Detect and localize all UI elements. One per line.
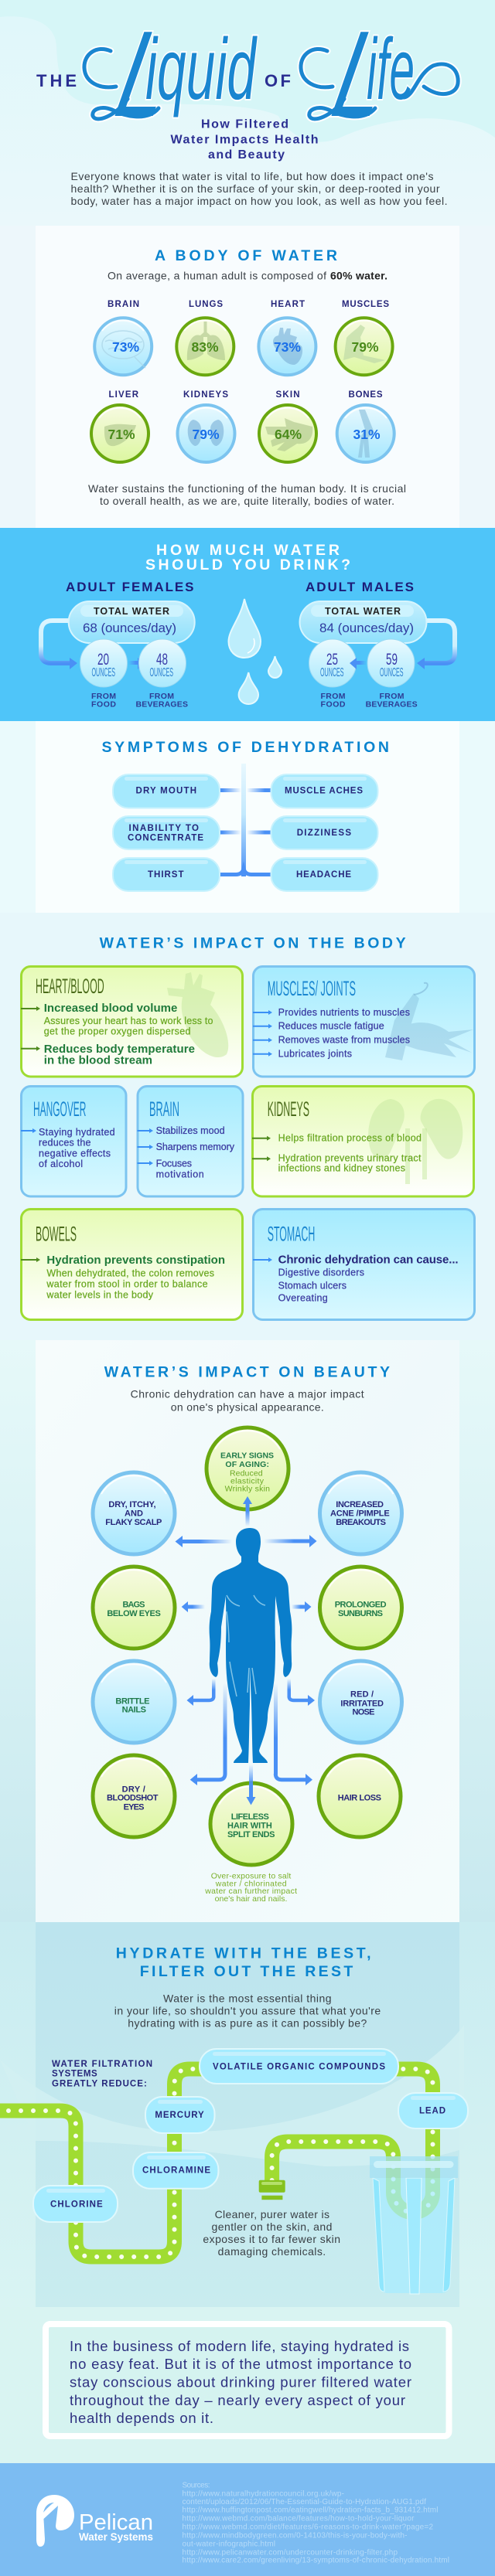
panel: how much water should you drink [0, 528, 495, 721]
intro text [71, 170, 447, 207]
panel: heart/blood [21, 966, 243, 1077]
circle: early signs of aging: elasticity [230, 1476, 265, 1485]
circle: brain: BRAIN [108, 300, 139, 309]
circle: brittle nails: BRITTLE [115, 1696, 150, 1706]
text: filtration systems reduce: GREATLY REDUCE: [52, 2079, 147, 2088]
bubble: 48 ounces from beverages: FROM [149, 692, 174, 701]
bubble: 20 ounces from food: FOOD [91, 700, 116, 710]
panel: brain: BRAIN [149, 1097, 179, 1121]
circle: liver: LIVER [108, 390, 139, 400]
callout: closing statement: In the business of modern life, staying hydrated is [70, 2338, 409, 2354]
pill: mercury: MERCURY [155, 2111, 204, 2120]
panel: muscles/joints: Lubricates joints [278, 1048, 352, 1059]
bubble: 59 ounces from beverages: BEVERAGES [366, 700, 418, 710]
panel: hangover: Staying hydrated [39, 1127, 115, 1138]
background: header area [0, 0, 495, 226]
pill: headache [271, 858, 377, 891]
panel: muscles/joints: Removes waste from muscles [278, 1035, 410, 1046]
arrow: beverages to food [350, 658, 367, 669]
pill: dizziness: DIZZINESS [297, 829, 351, 838]
circle: dry bloodshot eyes [93, 1755, 175, 1837]
logo wordmark: Pelican [79, 2510, 153, 2535]
arrow: food to beverages [128, 658, 145, 669]
circle: dry bloodshot eyes: EYES [124, 1802, 144, 1812]
panel: kidneys: Hydration prevents urinary tract [278, 1153, 422, 1164]
text: sources: http://www.webmd.com/balance/features/how-to-hold-your-liquor [183, 2515, 415, 2523]
group: adult males: TOTAL WATER [325, 606, 401, 617]
arrow: to sunburns [292, 1601, 311, 1612]
bubble: 25 ounces from food [309, 639, 356, 710]
panel: hangover: of alcohol [39, 1159, 83, 1169]
title: iquid [145, 21, 258, 117]
group: adult males: ADULT MALES [306, 580, 414, 594]
text: sources: http://www.pelicanwater.com/undercounter-drinking-filter.php [183, 2549, 398, 2557]
panel: bowels: water levels in the body [46, 1289, 154, 1300]
pill: volatile organic compounds [200, 2049, 398, 2084]
text: chronic dehydration: Chronic dehydration can have a major impact [131, 1388, 364, 1400]
bubble: 25 ounces from food: OUNCES [320, 666, 343, 679]
pill: lead [398, 2093, 468, 2129]
panel: muscles/joints: Provides nutrients to muscles [278, 1007, 410, 1018]
text: sources: out-water-infographic.html [183, 2540, 275, 2549]
arrow: to nails [187, 1679, 215, 1706]
panel: hangover [21, 1087, 126, 1196]
text: sources: http://www.webmd.com/diet/features/6-reasons-to-drink-water?page=2 [183, 2523, 433, 2532]
circle: dry bloodshot eyes: BLOODSHOT [107, 1794, 159, 1803]
panel: stomach: Digestive disorders [278, 1268, 364, 1278]
circle: muscles: 79% [351, 339, 379, 355]
heading: impact on beauty: WATER’S IMPACT ON BEAUTY [104, 1364, 390, 1381]
panel: bowels: When dehydrated, the colon removes [46, 1268, 214, 1279]
icon: pipe nozzle [259, 2180, 285, 2200]
text: sources [183, 2481, 449, 2564]
arrow: to eyes [190, 1683, 227, 1785]
circle: increased acne/pimple breakouts: BREAKOUTS [336, 1518, 386, 1527]
circle: kidneys [178, 390, 235, 462]
title: OF [265, 71, 291, 90]
circle: brain: 73% [112, 339, 139, 355]
pill: inability to concentrate: INABILITY TO [128, 824, 199, 833]
circle: liver [91, 390, 148, 462]
panel: heart/blood: get the proper oxygen dispersed [44, 1026, 191, 1037]
text: cleaner purer water: gentler on the skin, and [212, 2220, 332, 2233]
bubble: 25 ounces from food: 25 [326, 651, 338, 669]
text: sources: http://www.huffingtonpost.com/eatingwell/hydration-facts_b_931412.html [183, 2506, 438, 2515]
intro text: health? Whether it is on the surface of your skin, or deep-rooted in your [71, 182, 440, 195]
pipe arrow: total to beverages [417, 621, 455, 669]
heading: hydrate [116, 1945, 371, 1980]
circle: increased acne/pimple breakouts: ACNE /PIMPLE [330, 1509, 390, 1519]
icon: pelican logo mark [36, 2495, 74, 2547]
bubble: 20 ounces from food: OUNCES [91, 666, 115, 679]
heading: how much water: HOW MUCH WATER [156, 542, 340, 559]
footer [0, 2463, 495, 2576]
heading: symptoms: SYMPTOMS OF DEHYDRATION [102, 739, 389, 756]
bubble: 20 ounces from food: 20 [97, 651, 109, 669]
panel: heart/blood: in the blood stream [44, 1054, 152, 1067]
heading: how much water [145, 542, 350, 573]
panel: brain [138, 1087, 243, 1196]
circle: dry, itchy, flaky scalp: DRY, ITCHY, [108, 1500, 156, 1509]
circle: heart [258, 300, 316, 375]
circle: increased acne/pimple breakouts [320, 1472, 402, 1554]
group: adult males: 84 (ounces/day) [319, 621, 414, 635]
panel: stomach: STOMACH [268, 1223, 315, 1246]
bubble: 48 ounces from beverages: OUNCES [150, 666, 173, 679]
circle: lifeless hair with split ends: LIFELESS [231, 1812, 269, 1822]
intro text: Everyone knows that water is vital to life, but how does it impact one's [71, 170, 433, 182]
heading: a body of water: A BODY OF WATER [155, 247, 337, 264]
callout: closing statement: throughout the day – nearly every aspect of your [70, 2392, 405, 2408]
pill: dry mouth [113, 774, 220, 808]
panel: brain: Sharpens memory [156, 1142, 235, 1152]
pill: dry mouth: DRY MOUTH [136, 787, 196, 796]
circle: increased acne/pimple breakouts: INCREASED [336, 1500, 384, 1509]
pill: mercury [145, 2097, 215, 2133]
text: over-exposure note: one's hair and nails. [215, 1894, 287, 1904]
circle: lungs: 83% [191, 339, 219, 355]
panel: stomach [253, 1209, 475, 1320]
text: most essential thing: in your life, so shouldn't you assure that what you're [114, 2005, 381, 2017]
bubble: 48 ounces from beverages [136, 639, 188, 710]
text: filtration systems reduce: SYSTEMS [52, 2070, 97, 2079]
panel: kidneys [252, 1087, 473, 1196]
pill: muscle aches: MUSCLE ACHES [285, 787, 363, 796]
group: adult females: TOTAL WATER [94, 606, 169, 617]
circle: lungs: LUNGS [189, 300, 223, 309]
bubble: 25 ounces from food: FOOD [320, 700, 346, 710]
background: closing section [0, 2307, 495, 2463]
panel: muscles/joints: Reduces muscle fatigue [278, 1021, 384, 1032]
panel: brain: motivation [156, 1169, 204, 1179]
circle: bones [337, 390, 394, 462]
text: most essential thing: hydrating with is as pure as it can possibly be? [128, 2017, 367, 2030]
text: over-exposure note: water / chlorinated [215, 1880, 287, 1889]
text: cleaner purer water [203, 2208, 340, 2258]
circle: early signs of aging [207, 1428, 288, 1509]
pill: muscle aches [271, 774, 377, 808]
section: water's impact on the body [0, 913, 495, 1340]
arrow: to hair loss [274, 1683, 312, 1785]
title: ife [367, 21, 415, 117]
circle: lifeless hair with split ends: SPLIT ENDS [227, 1830, 275, 1839]
circle: lungs [176, 300, 234, 375]
circle: bags below eyes [93, 1567, 175, 1649]
circle: bags below eyes: BAGS [122, 1601, 145, 1610]
circle: heart: HEART [271, 300, 305, 309]
text: cleaner purer water: Cleaner, purer water is [215, 2208, 329, 2220]
subtitle [170, 117, 319, 162]
bubble: 25 ounces from food: FROM [320, 692, 346, 701]
arrow: to early signs [243, 1496, 252, 1526]
arrow: to lifeless hair [246, 1764, 255, 1805]
pill: lead: LEAD [419, 2107, 446, 2116]
panel: a body of water [0, 226, 495, 528]
bubble: 59 ounces from beverages [366, 639, 418, 710]
panel: heart/blood: Reduces body temperature [44, 1043, 195, 1056]
text: over-exposure note: water can further impact [204, 1887, 297, 1896]
circle: brittle nails [93, 1661, 175, 1743]
panel: brain: Focuses [156, 1159, 192, 1169]
subtitle: and Beauty [208, 148, 285, 162]
text: most essential thing [114, 1992, 381, 2030]
text: filtration systems reduce [52, 2060, 152, 2088]
pipe: filtration pipeline [0, 2069, 433, 2257]
circle: red irritated nose: NOSE [353, 1708, 374, 1717]
pill: chlorine: CHLORINE [50, 2200, 103, 2209]
panel: symptoms of dehydration [0, 721, 495, 913]
circle: lifeless hair with split ends: HAIR WITH [227, 1821, 272, 1830]
text: water sustains: Water sustains the functioning of the human body. It is crucial [88, 482, 406, 495]
panel: muscles/joints [253, 966, 475, 1077]
panel: heart/blood: HEART/BLOOD [36, 975, 104, 998]
arrow: to acne [264, 1535, 317, 1547]
pill: chlorine [33, 2186, 118, 2222]
circle: bones: 31% [353, 427, 381, 442]
panel: stomach: Overeating [278, 1293, 328, 1304]
panel: kidneys: KIDNEYS [268, 1097, 309, 1121]
icon: water glass [370, 2156, 458, 2294]
panel: bowels: BOWELS [36, 1223, 77, 1246]
circle: skin [259, 390, 316, 462]
bubble: 59 ounces from beverages: FROM [379, 692, 405, 701]
pill: headache: HEADACHE [296, 870, 351, 880]
text: sources: Sources: [183, 2481, 210, 2490]
pill: chloramine: CHLORAMINE [142, 2166, 210, 2176]
text: water sustains: to overall health, as we are, quite literally, bodies of water. [100, 495, 394, 507]
panel: kidneys: infections and kidney stones [278, 1162, 405, 1173]
text: over-exposure note: Over-exposure to salt [211, 1872, 291, 1881]
panel: hydrate with the best [0, 1922, 495, 2307]
circle: hair loss: HAIR LOSS [338, 1794, 381, 1803]
circle: early signs of aging: OF AGING: [225, 1460, 269, 1469]
panel: bowels: water from stool in order to balance [46, 1278, 208, 1289]
circle: kidneys: KIDNEYS [183, 390, 228, 400]
heading: impact on body: WATER’S IMPACT ON THE BODY [100, 935, 406, 952]
bubble: 48 ounces from beverages: 48 [156, 651, 168, 669]
bubble: 20 ounces from food: FROM [91, 692, 116, 701]
intro text: body, water has a major impact on how you look, as well as how you feel. [71, 195, 447, 207]
pill: dizziness [271, 816, 377, 849]
panel: hangover: negative effects [39, 1148, 111, 1159]
pill: thirst: THIRST [148, 870, 184, 880]
panel: kidneys: Helps filtration process of blood [278, 1133, 422, 1144]
circle: prolonged sunburns [320, 1567, 402, 1649]
circle: heart: 73% [274, 339, 301, 355]
circle: dry, itchy, flaky scalp [93, 1472, 175, 1554]
arrow: to bags [182, 1601, 205, 1612]
circle: muscles: MUSCLES [342, 300, 389, 309]
circle: brittle nails: NAILS [122, 1706, 146, 1715]
heading: how much water: SHOULD YOU DRINK? [145, 556, 350, 573]
pill: inability to concentrate [113, 816, 220, 849]
circle: liver: 71% [108, 427, 135, 442]
subtitle: How Filtered [201, 117, 288, 131]
bubble: 20 ounces from food [80, 639, 127, 710]
group: adult females: ADULT FEMALES [66, 580, 193, 594]
text: chronic dehydration [131, 1388, 364, 1413]
circle: red irritated nose: RED / [350, 1690, 374, 1700]
callout: closing statement [46, 2324, 449, 2436]
group: adult males [300, 580, 455, 710]
text: sources: http://www.care2.com/greenliving/13-symptoms-of-chronic-dehydration.html [183, 2557, 449, 2564]
bubble: 59 ounces from beverages: OUNCES [380, 666, 404, 679]
circle: red irritated nose: IRRITATED [340, 1699, 384, 1708]
figure: human body [210, 1528, 292, 1763]
panel: hangover: HANGOVER [33, 1097, 86, 1121]
arrow: to scalp [175, 1536, 232, 1547]
circle: dry, itchy, flaky scalp: AND [125, 1509, 143, 1519]
pill: chloramine [133, 2152, 218, 2189]
text: most essential thing: Water is the most essential thing [163, 1992, 332, 2005]
text: chronic dehydration: on one's physical appearance. [171, 1400, 324, 1413]
panel: heart/blood: Assures your heart has to work less to [44, 1016, 213, 1026]
text: sources: content/uploads/2012/06/The-Essential-Guide-to-Hydration-AUG1.pdf [183, 2498, 426, 2506]
panel: heart/blood: Increased blood volume [44, 1002, 177, 1015]
callout: closing statement: stay conscious about drinking purer filtered water [70, 2374, 411, 2390]
text: cleaner purer water: damaging chemicals. [218, 2245, 326, 2258]
title: L [323, 5, 400, 142]
panel: bowels: Hydration prevents constipation [46, 1254, 225, 1267]
text: cleaner purer water: exposes it to far fewer skin [203, 2233, 340, 2245]
group: adult females: 68 (ounces/day) [83, 621, 176, 635]
arrow: to nose [288, 1679, 315, 1706]
bubble: 48 ounces from beverages: BEVERAGES [136, 700, 188, 710]
circle: skin: SKIN [275, 390, 300, 400]
diagram: symptom tree [207, 764, 281, 880]
circle: kidneys: 79% [192, 427, 220, 442]
panel: brain: Stabilizes mood [156, 1125, 225, 1136]
pill: volatile organic compounds: VOLATILE ORGANIC COMPOUNDS [213, 2062, 385, 2071]
circle: hair loss [319, 1755, 401, 1837]
callout: closing statement: health depends on it. [70, 2410, 213, 2426]
group: adult females [41, 580, 195, 710]
text: composition: 60% water. [330, 270, 387, 282]
circle: red irritated nose [320, 1661, 402, 1743]
text: sources: http://www.naturalhydrationcouncil.org.uk/wp- [183, 2490, 344, 2498]
circle: muscles [336, 300, 393, 375]
circle: dry bloodshot eyes: DRY / [122, 1785, 145, 1794]
panel: bowels [21, 1209, 243, 1320]
panel: stomach: Stomach ulcers [278, 1280, 346, 1291]
circle: prolonged sunburns: SUNBURNS [338, 1609, 383, 1618]
text: composition: On average, a human adult is composed of [108, 270, 326, 282]
panel: water's impact on beauty [0, 1340, 495, 1922]
heading: hydrate: FILTER OUT THE REST [140, 1963, 353, 1980]
text: filtration systems reduce: WATER FILTRATION [52, 2060, 152, 2069]
title: L [107, 5, 183, 142]
panel: hangover: reduces the [39, 1138, 91, 1148]
title [36, 5, 458, 142]
text: over-exposure note [204, 1872, 297, 1904]
circle: early signs of aging: Reduced [230, 1468, 263, 1478]
panel: muscles/joints: MUSCLES/ JOINTS [268, 977, 356, 1000]
pill: thirst [113, 858, 220, 891]
circle: dry, itchy, flaky scalp: FLAKY SCALP [105, 1518, 162, 1527]
heading: hydrate: HYDRATE WITH THE BEST, [116, 1945, 371, 1962]
icon: water drops [229, 599, 282, 704]
panel: stomach: Chronic dehydration can cause... [278, 1253, 459, 1266]
callout: closing statement: no easy feat. But it is of the utmost importance to [70, 2356, 411, 2372]
pill: inability to concentrate: CONCENTRATE [128, 833, 203, 842]
text: water sustains [88, 482, 406, 507]
circle: skin: 64% [275, 427, 302, 442]
text: sources: http://www.mindbodygreen.com/0-14103/this-is-your-body-with- [183, 2532, 407, 2540]
circle: bones: BONES [348, 390, 383, 400]
circle: early signs of aging: EARLY SIGNS [220, 1451, 274, 1461]
bubble: 59 ounces from beverages: 59 [386, 651, 398, 669]
circle: brain [94, 300, 152, 375]
title: THE [36, 71, 77, 90]
subtitle: Water Impacts Health [170, 133, 319, 147]
circle: bags below eyes: BELOW EYES [107, 1609, 161, 1618]
circle: prolonged sunburns: PROLONGED [335, 1601, 387, 1610]
circle: early signs of aging: Wrinkly skin [225, 1484, 270, 1493]
circle: lifeless hair with split ends [210, 1783, 292, 1865]
logo wordmark: Water Systems [79, 2530, 153, 2543]
pipe arrow: total to food [41, 621, 77, 669]
